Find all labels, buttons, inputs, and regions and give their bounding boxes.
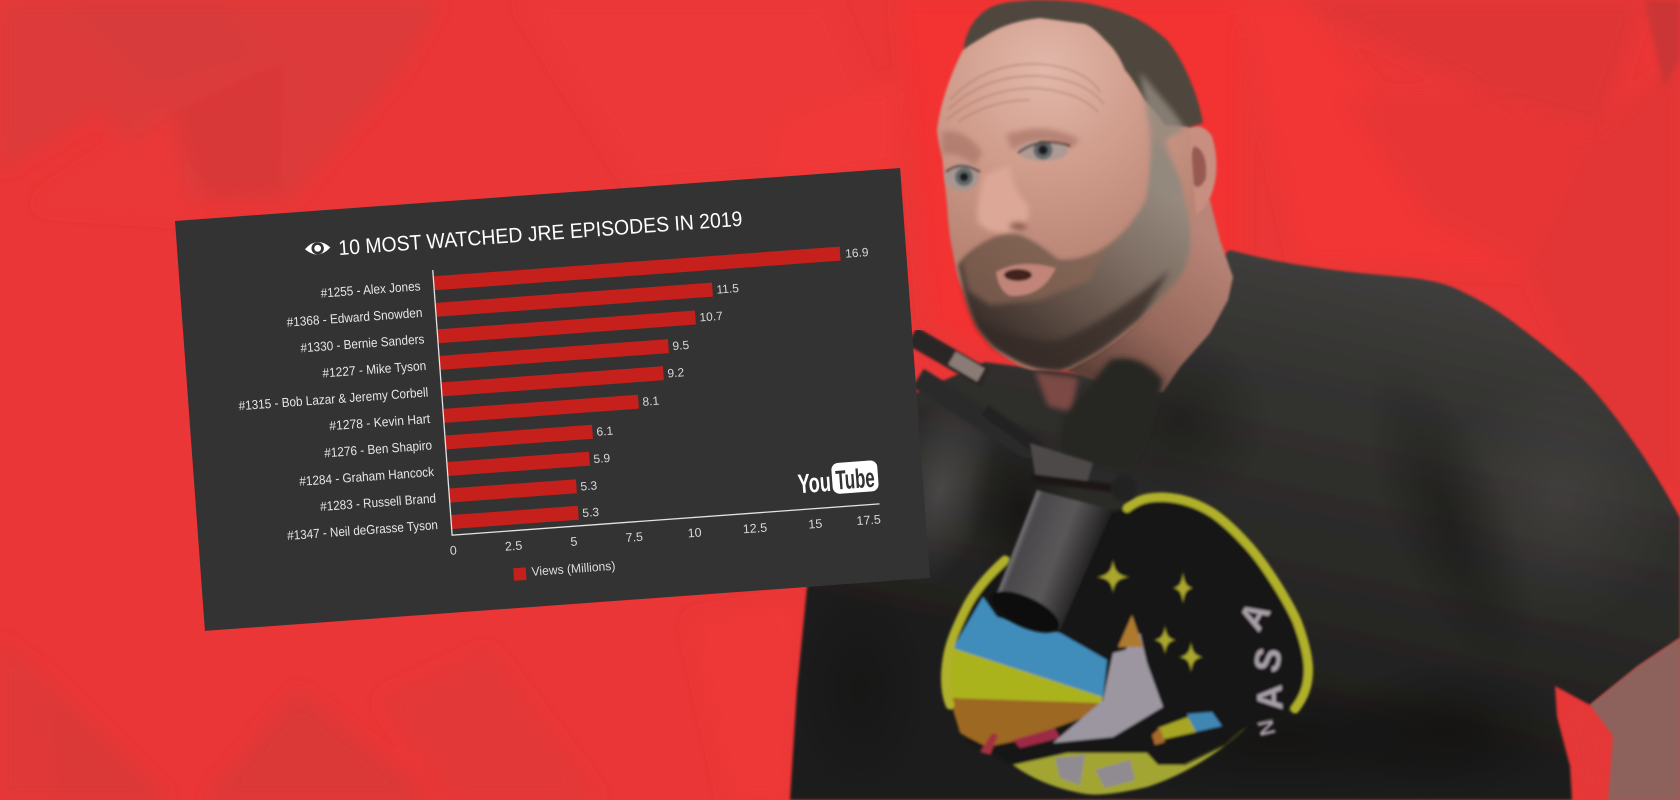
shuttle — [1053, 633, 1163, 743]
mic arm — [912, 336, 1040, 452]
title text: 10 MOST WATCHED JRE EPISODES IN 2019 — [338, 208, 743, 260]
value labels: 9.5 — [672, 338, 690, 353]
ear — [1170, 126, 1217, 214]
value labels — [564, 245, 887, 520]
x axis tick labels: 10 — [687, 525, 702, 540]
temple grey — [1140, 72, 1185, 195]
category labels: #1330 - Bernie Sanders — [300, 331, 425, 355]
nasa lettering: A — [1249, 684, 1290, 711]
value labels: 10.7 — [699, 309, 724, 325]
right eye — [1018, 140, 1070, 161]
moon grey patches — [1055, 755, 1135, 788]
corner polygon — [1644, 0, 1680, 87]
icon: youtube logo — [797, 460, 879, 499]
category labels — [230, 278, 439, 546]
legend: Views (Millions) — [531, 559, 616, 579]
value labels: 5.3 — [582, 505, 600, 520]
nasa logo — [945, 497, 1309, 795]
panel: bar chart card — [175, 168, 930, 631]
mic tube — [985, 490, 1113, 641]
icon: youtube logo: Tube — [835, 463, 876, 495]
x axis tick labels: 2.5 — [504, 539, 523, 554]
category labels: #1347 - Neil deGrasse Tyson — [287, 517, 438, 543]
nose — [977, 165, 1029, 233]
yellow band — [945, 648, 1103, 705]
x axis tick labels: 7.5 — [625, 530, 643, 545]
arm — [1590, 638, 1680, 800]
category labels: #1276 - Ben Shapiro — [324, 437, 433, 460]
icon: eye — [304, 241, 331, 255]
mouth — [996, 264, 1056, 296]
nasa lettering: A — [1230, 594, 1278, 637]
brow shadows — [942, 129, 1080, 166]
x axis tick labels — [449, 512, 881, 558]
x axis tick labels: 17.5 — [856, 512, 881, 528]
value labels: 8.1 — [642, 394, 660, 409]
beard dark lower edge — [975, 270, 1170, 370]
mic foam — [1060, 358, 1163, 470]
pink stripe — [1013, 728, 1060, 748]
category labels: #1227 - Mike Tyson — [322, 358, 427, 380]
blue band — [953, 597, 1107, 697]
title — [304, 208, 743, 263]
stars — [1095, 558, 1204, 674]
category labels: #1255 - Alex Jones — [320, 278, 421, 301]
small orange patch — [1152, 728, 1165, 745]
category labels: #1368 - Edward Snowden — [286, 305, 423, 330]
mustache tint — [962, 233, 1110, 305]
category labels: #1315 - Bob Lazar & Jeremy Corbell — [238, 384, 429, 413]
head — [937, 12, 1196, 370]
left eye — [945, 163, 980, 191]
neck opening — [1035, 372, 1078, 412]
category labels: #1283 - Russell Brand — [320, 491, 436, 514]
value labels: 5.9 — [593, 451, 611, 466]
value labels: 6.1 — [596, 424, 614, 439]
shirt folds and shadows — [790, 330, 1680, 800]
forehead wrinkles — [946, 64, 1104, 122]
x axis tick labels: 0 — [449, 543, 457, 558]
category labels: #1284 - Graham Hancock — [299, 464, 435, 489]
logo interior — [946, 501, 1305, 793]
orange band — [950, 698, 1100, 747]
small blue patch — [1187, 712, 1222, 732]
hair — [963, 0, 1203, 127]
mic mount — [1030, 443, 1137, 501]
beard — [958, 140, 1191, 370]
axes — [433, 239, 879, 535]
shuttle nose — [1118, 615, 1143, 647]
ring — [946, 497, 1309, 709]
nasa lettering: N — [1253, 717, 1281, 739]
value labels: 5.3 — [580, 478, 598, 494]
neck — [1065, 200, 1233, 392]
x axis tick labels: 12.5 — [742, 521, 768, 536]
x axis tick labels: 5 — [570, 535, 578, 549]
value labels: 11.5 — [716, 281, 740, 297]
value labels: 9.2 — [667, 365, 685, 380]
icon: youtube logo: You — [797, 467, 832, 499]
small yellow patch — [1158, 717, 1196, 740]
nasa lettering: S — [1245, 644, 1290, 675]
x axis tick labels: 15 — [808, 517, 823, 532]
moon — [1013, 727, 1247, 795]
person — [790, 0, 1680, 800]
value labels: 16.9 — [845, 245, 869, 261]
bars — [434, 247, 858, 529]
shirt — [790, 250, 1680, 800]
nasa lettering — [1230, 594, 1290, 739]
category labels: #1278 - Kevin Hart — [329, 411, 431, 433]
red drip — [980, 733, 998, 755]
